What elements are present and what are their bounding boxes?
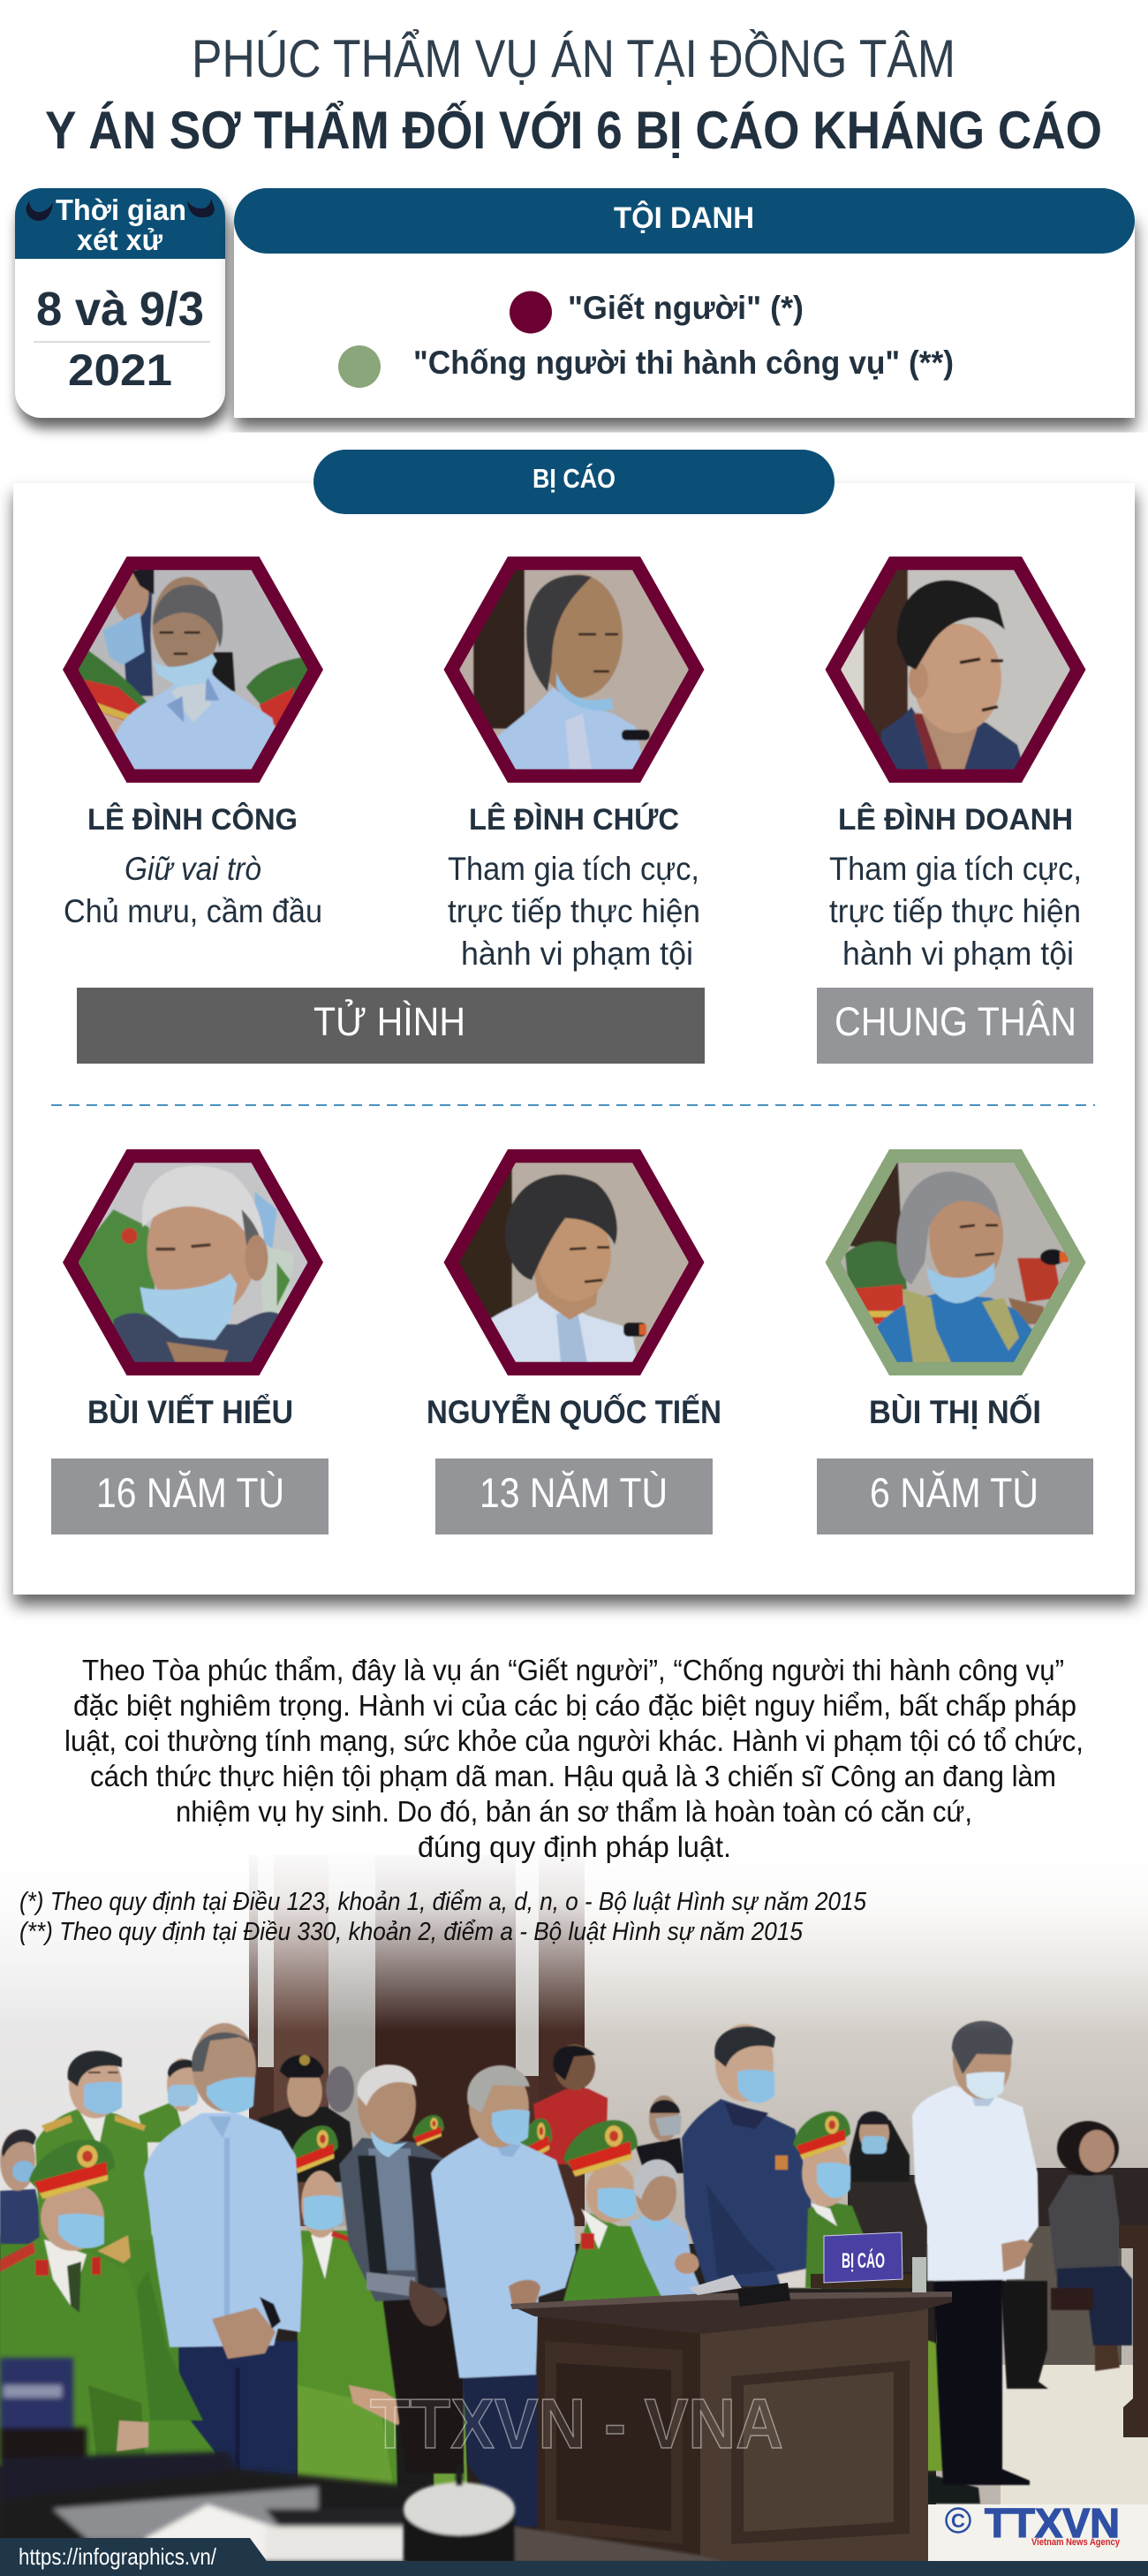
defendant: Lê Đình Công xyxy=(64,802,322,929)
heading pill: charges: TỘI DANH xyxy=(614,201,754,235)
heading pill: charges xyxy=(234,188,1135,254)
logo TTXVN: TTXVN xyxy=(985,2500,1120,2546)
sentence: 6 years: 6 NĂM TÙ xyxy=(870,1469,1038,1516)
date value: 2021 xyxy=(68,345,172,395)
floor xyxy=(1001,2365,1148,2561)
items on podium: phone, sign xyxy=(689,2232,926,2307)
person: seated legs and officer legs behind defendant xyxy=(925,2281,1048,2504)
paragraph: court summary: cách thức thực hiện tội phạm dã man. Hậu quả là 3 chiến sĩ Công an đang làm xyxy=(90,1760,1056,1792)
paragraph: court summary: đặc biệt nghiêm trọng. Hành vi của các bị cáo đặc biệt nguy hiểm, bất chấp pháp xyxy=(73,1689,1076,1722)
defendant: Lê Đình Công: Giữ vai trò xyxy=(125,851,261,887)
person: old man in dark jacket xyxy=(339,2065,464,2474)
sentence: life imprisonment: CHUNG THÂN xyxy=(835,999,1076,1044)
defendant: Lê Đình Chức xyxy=(448,803,700,972)
logo TTXVN xyxy=(928,2500,1148,2561)
date value xyxy=(34,283,210,395)
portrait: Lê Đình Chức xyxy=(443,557,705,783)
panel: defendants xyxy=(13,450,1135,1595)
heading pill: defendants: BỊ CÁO xyxy=(532,463,616,494)
date header text xyxy=(56,193,186,256)
person: second defendant standing xyxy=(431,2065,576,2527)
paragraph: court summary: Theo Tòa phúc thẩm, đây là vụ án “Giết người”, “Chống người thi hành công vụ” xyxy=(82,1654,1064,1686)
date header text: Thời gian xyxy=(56,193,186,226)
paragraph: court summary: nhiệm vụ hy sinh. Do đó, bản án sơ thẩm là hoàn toàn có căn cứ, xyxy=(176,1795,972,1828)
person: officer behind sign xyxy=(793,2111,910,2288)
bench back right xyxy=(1036,2168,1148,2226)
foreground cup xyxy=(404,2465,724,2562)
defendant name: Nguyễn Quốc Tiến: NGUYỄN QUỐC TIẾN xyxy=(427,1393,721,1430)
defendant: Lê Đình Công: LÊ ĐÌNH CÔNG xyxy=(87,802,298,837)
legend: murder xyxy=(510,290,804,334)
defendant: Lê Đình Doanh: trực tiếp thực hiện xyxy=(829,893,1081,929)
door xyxy=(249,1855,585,2226)
person: left spectator xyxy=(0,2129,42,2244)
portrait: Bùi Viết Hiểu xyxy=(63,1149,323,1375)
portrait: Lê Đình Công xyxy=(63,557,323,783)
defendant: Lê Đình Chức: LÊ ĐÌNH CHỨC xyxy=(469,803,679,837)
portrait: Bùi Thị Nối xyxy=(825,1149,1086,1375)
icon: calendar ring left xyxy=(26,201,53,221)
title xyxy=(45,29,1102,160)
portrait: Lê Đình Doanh xyxy=(825,557,1086,783)
portrait: Nguyễn Quốc Tiến xyxy=(443,1149,705,1375)
defendant: Lê Đình Công: Chủ mưu, cầm đầu xyxy=(64,893,322,929)
date header text: xét xử xyxy=(77,224,162,256)
icon: calendar ring right xyxy=(187,199,215,217)
wall xyxy=(0,1855,1148,2562)
right post xyxy=(1119,2225,1148,2437)
sentence: 16 years: 16 NĂM TÙ xyxy=(96,1469,284,1516)
person: seated officer front left xyxy=(0,2140,215,2465)
defendant: Lê Đình Chức: hành vi phạm tội xyxy=(461,936,693,972)
person: police in dark uniform xyxy=(259,2055,357,2182)
person: white shirt defendant xyxy=(912,2021,1038,2485)
date value: 8 và 9/3 xyxy=(36,283,204,336)
defendant: Lê Đình Chức: Tham gia tích cực, xyxy=(448,851,699,887)
sentence: 16 years xyxy=(51,1458,329,1534)
defendant name: Bùi Thị Nối: BÙI THỊ NỐI xyxy=(869,1393,1041,1430)
footer bar: https://infographics.vn/ xyxy=(19,2543,217,2570)
defendant: Lê Đình Doanh: hành vi phạm tội xyxy=(842,936,1074,972)
person: man in red shirt xyxy=(518,2044,608,2164)
person: standing officer back left xyxy=(35,2051,198,2244)
sentence: 13 years xyxy=(435,1458,713,1534)
paragraph: court summary: đúng quy định pháp luật. xyxy=(418,1830,731,1863)
sign: BỊ CÁO xyxy=(824,2232,903,2283)
legend: resisting officers: "Chống người thi hành công vụ" (**) xyxy=(413,345,954,381)
person: navy jacket defendant xyxy=(682,2024,821,2288)
defendant: Lê Đình Doanh: Tham gia tích cực, xyxy=(829,851,1082,887)
legend: murder: "Giết người" (*) xyxy=(568,290,804,326)
courtroom photo xyxy=(0,1855,1148,2562)
logo TTXVN: Vietnam News Agency xyxy=(1031,2537,1121,2548)
paragraph: court summary xyxy=(64,1654,1084,1863)
footnotes: (**) Theo quy định tại Điều 330, khoản 2, điểm a - Bộ luật Hình sự năm 2015 xyxy=(19,1918,804,1946)
defendant name: Bùi Viết Hiểu: BÙI VIẾT HIỂU xyxy=(87,1393,293,1430)
sentence: 13 years: 13 NĂM TÙ xyxy=(480,1469,668,1516)
sentence: life imprisonment xyxy=(817,988,1093,1064)
watermark TTXVN-VNA: TTXVN - VNA xyxy=(370,2384,783,2463)
sentence: death penalty: TỬ HÌNH xyxy=(313,999,465,1044)
podium xyxy=(510,2292,952,2561)
footnotes xyxy=(19,1888,867,1946)
sign: BỊ CÁO: BỊ CÁO xyxy=(842,2248,885,2273)
foreground desk blurred xyxy=(0,2358,442,2562)
defendant: Lê Đình Doanh xyxy=(829,803,1082,972)
green mass of seated officers xyxy=(0,2231,465,2500)
heading pill: defendants xyxy=(313,450,835,514)
person: seated back right spectator xyxy=(636,2095,684,2173)
defendant: Lê Đình Chức: trực tiếp thực hiện xyxy=(448,893,700,929)
panel: charges xyxy=(234,188,1135,418)
paragraph: court summary: luật, coi thường tính mạng, sức khỏe của người khác. Hành vi phạm tội có tổ chức, xyxy=(64,1724,1084,1757)
person: woman seated right xyxy=(1048,2121,1132,2371)
lower dark backdrop xyxy=(0,2244,936,2562)
panel: trial date calendar xyxy=(15,188,225,418)
person: seated officer beside podium xyxy=(562,2120,680,2307)
footer bar xyxy=(0,2538,1148,2576)
logo TTXVN: C xyxy=(951,2510,965,2532)
person: officer seated second xyxy=(290,2125,468,2500)
footnotes: (*) Theo quy định tại Điều 123, khoản 1, điểm a, d, n, o - Bộ luật Hình sự năm 2015 xyxy=(19,1888,867,1916)
fade of photo into white xyxy=(0,1842,1148,2032)
sentence: death penalty xyxy=(77,988,705,1064)
sentence: 6 years xyxy=(817,1458,1093,1534)
title: PHÚC THẨM VỤ ÁN TẠI ĐỒNG TÂM xyxy=(192,29,955,88)
person: first defendant standing xyxy=(144,2023,303,2484)
defendant: Lê Đình Doanh: LÊ ĐÌNH DOANH xyxy=(838,803,1073,837)
person: old woman defendant seated xyxy=(629,2159,709,2308)
